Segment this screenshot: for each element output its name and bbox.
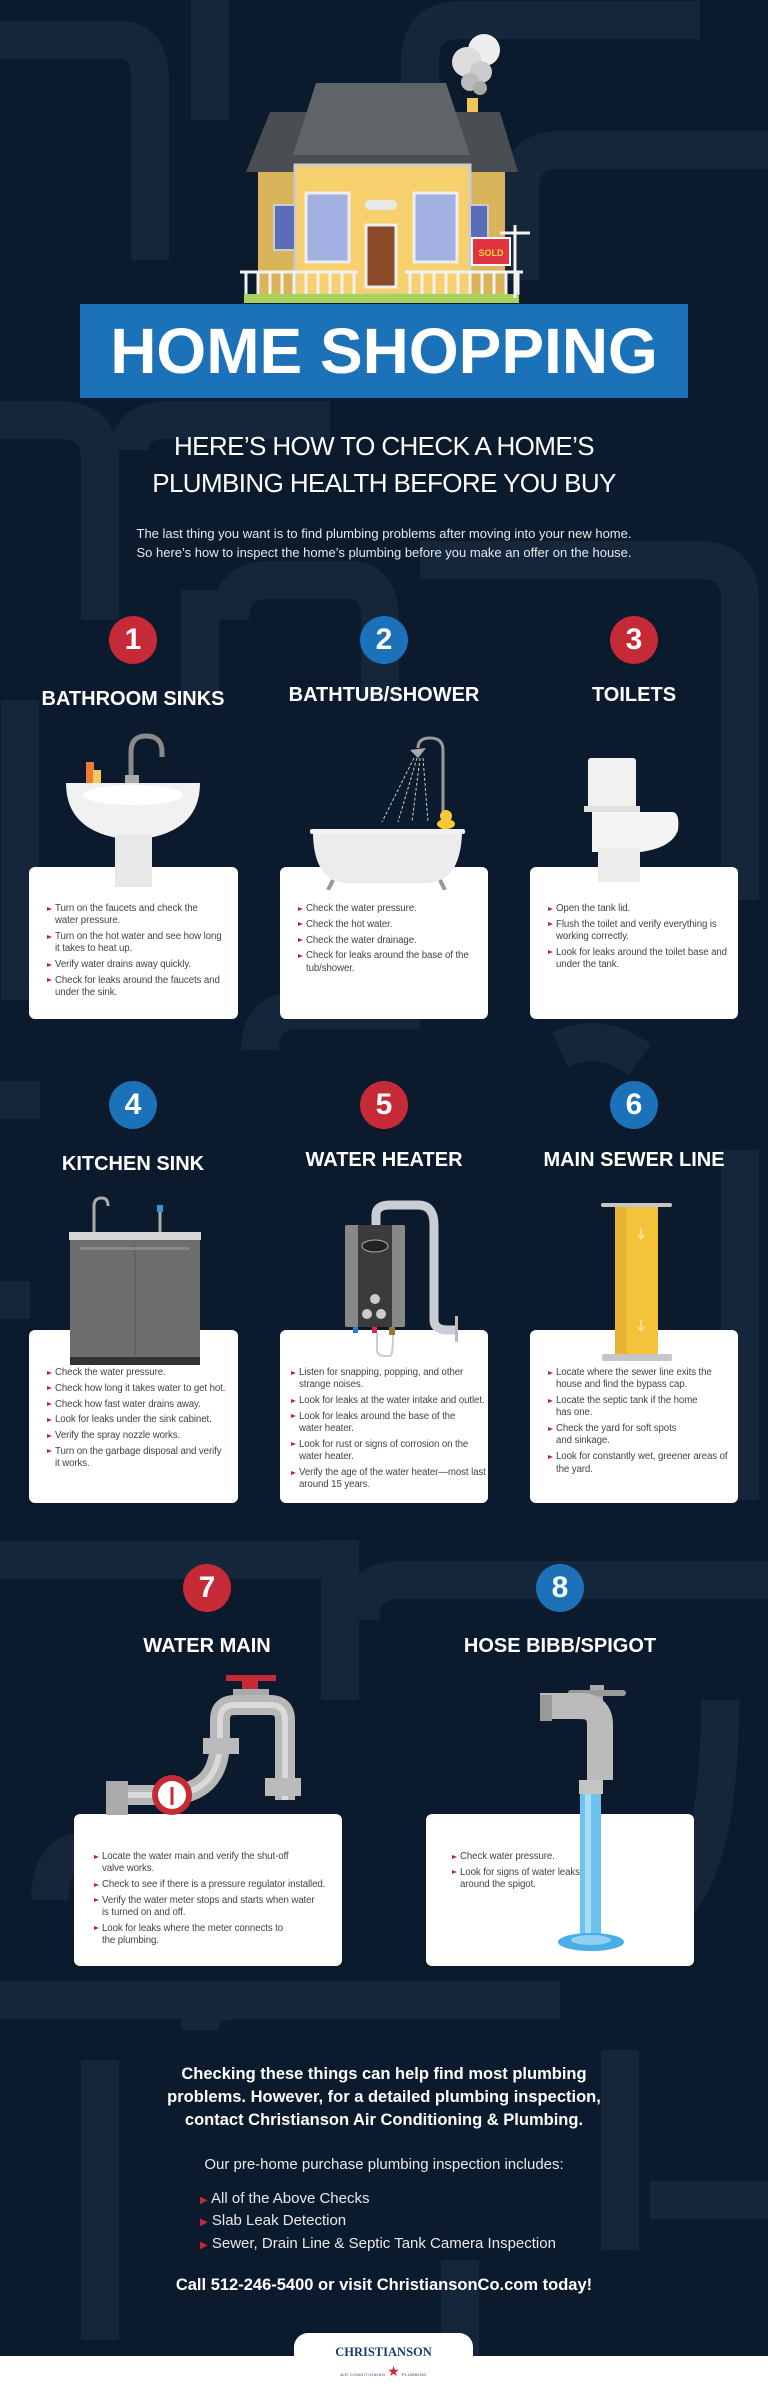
- number 4: 4: [125, 1088, 141, 1121]
- card 3: Flush the toilet and verify everything is: [556, 919, 717, 930]
- card 3: Look for leaks around the toilet base and: [556, 947, 727, 958]
- card 5: Look for leaks at the water intake and outlet.: [299, 1395, 484, 1406]
- number 4: [109, 1081, 157, 1129]
- heading 3: TOILETS: [592, 684, 676, 706]
- illustration: house: SOLD: [478, 248, 504, 258]
- card 3: Open the tank lid.: [556, 903, 630, 914]
- card 1: water pressure.: [55, 915, 120, 926]
- footer logo: AIR CONDITIONING ★ PLUMBING: [340, 2363, 427, 2379]
- card 7: Verify the water meter stops and starts when water: [102, 1895, 315, 1906]
- card 7: Locate the water main and verify the shut-off: [102, 1851, 288, 1862]
- number 7: 7: [199, 1571, 215, 1604]
- inspection list: ▶ Sewer, Drain Line & Septic Tank Camera Inspection: [200, 2235, 556, 2252]
- card 8: Look for signs of water leaks: [460, 1867, 580, 1878]
- card 1: under the sink.: [55, 987, 117, 998]
- closing statement: [167, 2065, 601, 2129]
- card 5: Verify the age of the water heater—most last: [299, 1467, 486, 1478]
- number 8: 8: [552, 1571, 568, 1604]
- card 5: Look for rust or signs of corrosion on the: [299, 1439, 468, 1450]
- card 1: it takes to heat up.: [55, 943, 132, 954]
- card 5: Listen for snapping, popping, and other: [299, 1367, 463, 1378]
- number 3: [610, 616, 658, 664]
- card 2: Check for leaks around the base of the: [306, 950, 469, 961]
- card 7: Look for leaks where the meter connects to: [102, 1923, 283, 1934]
- number 7: [183, 1564, 231, 1612]
- closing statement: contact Christianson Air Conditioning & Plumbing.: [185, 2111, 583, 2129]
- heading 4: KITCHEN SINK: [62, 1153, 204, 1175]
- heading 6: MAIN SEWER LINE: [543, 1149, 725, 1171]
- number 5: [360, 1081, 408, 1129]
- card 6: Locate where the sewer line exits the: [556, 1367, 712, 1378]
- card 1: [29, 867, 238, 1019]
- subtitle: PLUMBING HEALTH BEFORE YOU BUY: [152, 468, 616, 498]
- card 4: it works.: [55, 1458, 90, 1469]
- intro text: So here’s how to inspect the home’s plumbing before you make an offer on the house.: [136, 545, 632, 560]
- subtitle: HERE’S HOW TO CHECK A HOME’S: [174, 431, 594, 461]
- card 2: tub/shower.: [306, 963, 354, 974]
- illustration: water main pipes: [106, 1675, 301, 1815]
- heading 2: BATHTUB/SHOWER: [289, 684, 479, 706]
- heading 7: WATER MAIN: [143, 1635, 271, 1657]
- intro text: The last thing you want is to find plumbing problems after moving into your new home.: [136, 526, 631, 541]
- illustration: house: [240, 34, 530, 303]
- card 5: [280, 1330, 488, 1503]
- card 4: Check the water pressure.: [55, 1367, 166, 1378]
- card 6: house and find the bypass cap.: [556, 1379, 687, 1390]
- card 3: working correctly.: [556, 931, 629, 942]
- heading 5: WATER HEATER: [305, 1149, 463, 1171]
- card 7: Check to see if there is a pressure regulator installed.: [102, 1879, 325, 1890]
- card 2: Check the water drainage.: [306, 935, 417, 946]
- subtitle: [152, 431, 616, 498]
- number 8: [536, 1564, 584, 1612]
- card 3: [530, 867, 738, 1019]
- card 6: the yard.: [556, 1464, 593, 1475]
- heading 1: BATHROOM SINKS: [42, 688, 224, 710]
- card 6: and sinkage.: [556, 1435, 610, 1446]
- title banner: [80, 304, 688, 398]
- card 5: water heater.: [299, 1451, 354, 1462]
- illustration: kitchen sink: [69, 1196, 201, 1365]
- card 1: Verify water drains away quickly.: [55, 959, 191, 970]
- inspection includes intro: Our pre-home purchase plumbing inspection includes:: [204, 2156, 564, 2173]
- illustration: bathroom sink: [66, 734, 200, 887]
- footer logo: CHRISTIANSON: [335, 2345, 432, 2359]
- card 5: strange noises.: [299, 1379, 363, 1390]
- inspection list: ▶ All of the Above Checks: [200, 2190, 369, 2207]
- card 6: Look for constantly wet, greener areas of: [556, 1451, 727, 1462]
- illustration: hose bibb: [540, 1685, 626, 1951]
- closing statement: Checking these things can help find most plumbing: [181, 2065, 587, 2083]
- number 2: 2: [376, 623, 392, 656]
- card 7: the plumbing.: [102, 1935, 159, 1946]
- footer logo: [0, 2333, 768, 2392]
- illustration: toilet: [584, 758, 678, 882]
- card 1: Turn on the faucets and check the: [55, 903, 198, 914]
- card 4: Turn on the garbage disposal and verify: [55, 1446, 221, 1457]
- card 7: is turned on and off.: [102, 1907, 185, 1918]
- card 2: Check the water pressure.: [306, 903, 417, 914]
- card 6: [530, 1330, 738, 1503]
- number 5: 5: [376, 1088, 392, 1121]
- illustration: water heater: [345, 1200, 458, 1357]
- card 5: around 15 years.: [299, 1479, 370, 1490]
- number 6: 6: [626, 1088, 642, 1121]
- card 6: Locate the septic tank if the home: [556, 1395, 697, 1406]
- card 5: Look for leaks around the base of the: [299, 1411, 455, 1422]
- title banner: HOME SHOPPING: [110, 315, 658, 387]
- card 2: [280, 867, 488, 1019]
- number 1: [109, 616, 157, 664]
- heading 8: HOSE BIBB/SPIGOT: [464, 1635, 656, 1657]
- number 1: 1: [125, 623, 141, 656]
- number 3: 3: [626, 623, 642, 656]
- card 4: Verify the spray nozzle works.: [55, 1430, 180, 1441]
- call to action: Call 512-246-5400 or visit ChristiansonCo.com today!: [176, 2276, 592, 2294]
- card 7: [74, 1814, 342, 1966]
- card 1: Check for leaks around the faucets and: [55, 975, 220, 986]
- number 2: [360, 616, 408, 664]
- inspection list: ▶ Slab Leak Detection: [200, 2212, 346, 2229]
- card 8: around the spigot.: [460, 1879, 536, 1890]
- card 2: Check the hot water.: [306, 919, 392, 930]
- card 8: Check water pressure.: [460, 1851, 555, 1862]
- card 6: Check the yard for soft spots: [556, 1423, 676, 1434]
- card 5: water heater.: [299, 1423, 354, 1434]
- card 4: Look for leaks under the sink cabinet.: [55, 1414, 212, 1425]
- card 3: under the tank.: [556, 959, 619, 970]
- card 7: valve works.: [102, 1863, 154, 1874]
- inspection list: [200, 2190, 556, 2252]
- closing statement: problems. However, for a detailed plumbing inspection,: [167, 2088, 601, 2106]
- card 4: Check how long it takes water to get hot.: [55, 1383, 225, 1394]
- card 4: Check how fast water drains away.: [55, 1399, 201, 1410]
- card 4: [29, 1330, 238, 1503]
- illustration: bathtub: [310, 736, 465, 890]
- number 6: [610, 1081, 658, 1129]
- card 6: has one.: [556, 1407, 592, 1418]
- card 1: Turn on the hot water and see how long: [55, 931, 222, 942]
- illustration: sewer pipe: [601, 1203, 672, 1361]
- card 8: [426, 1814, 694, 1966]
- intro text: [136, 526, 632, 560]
